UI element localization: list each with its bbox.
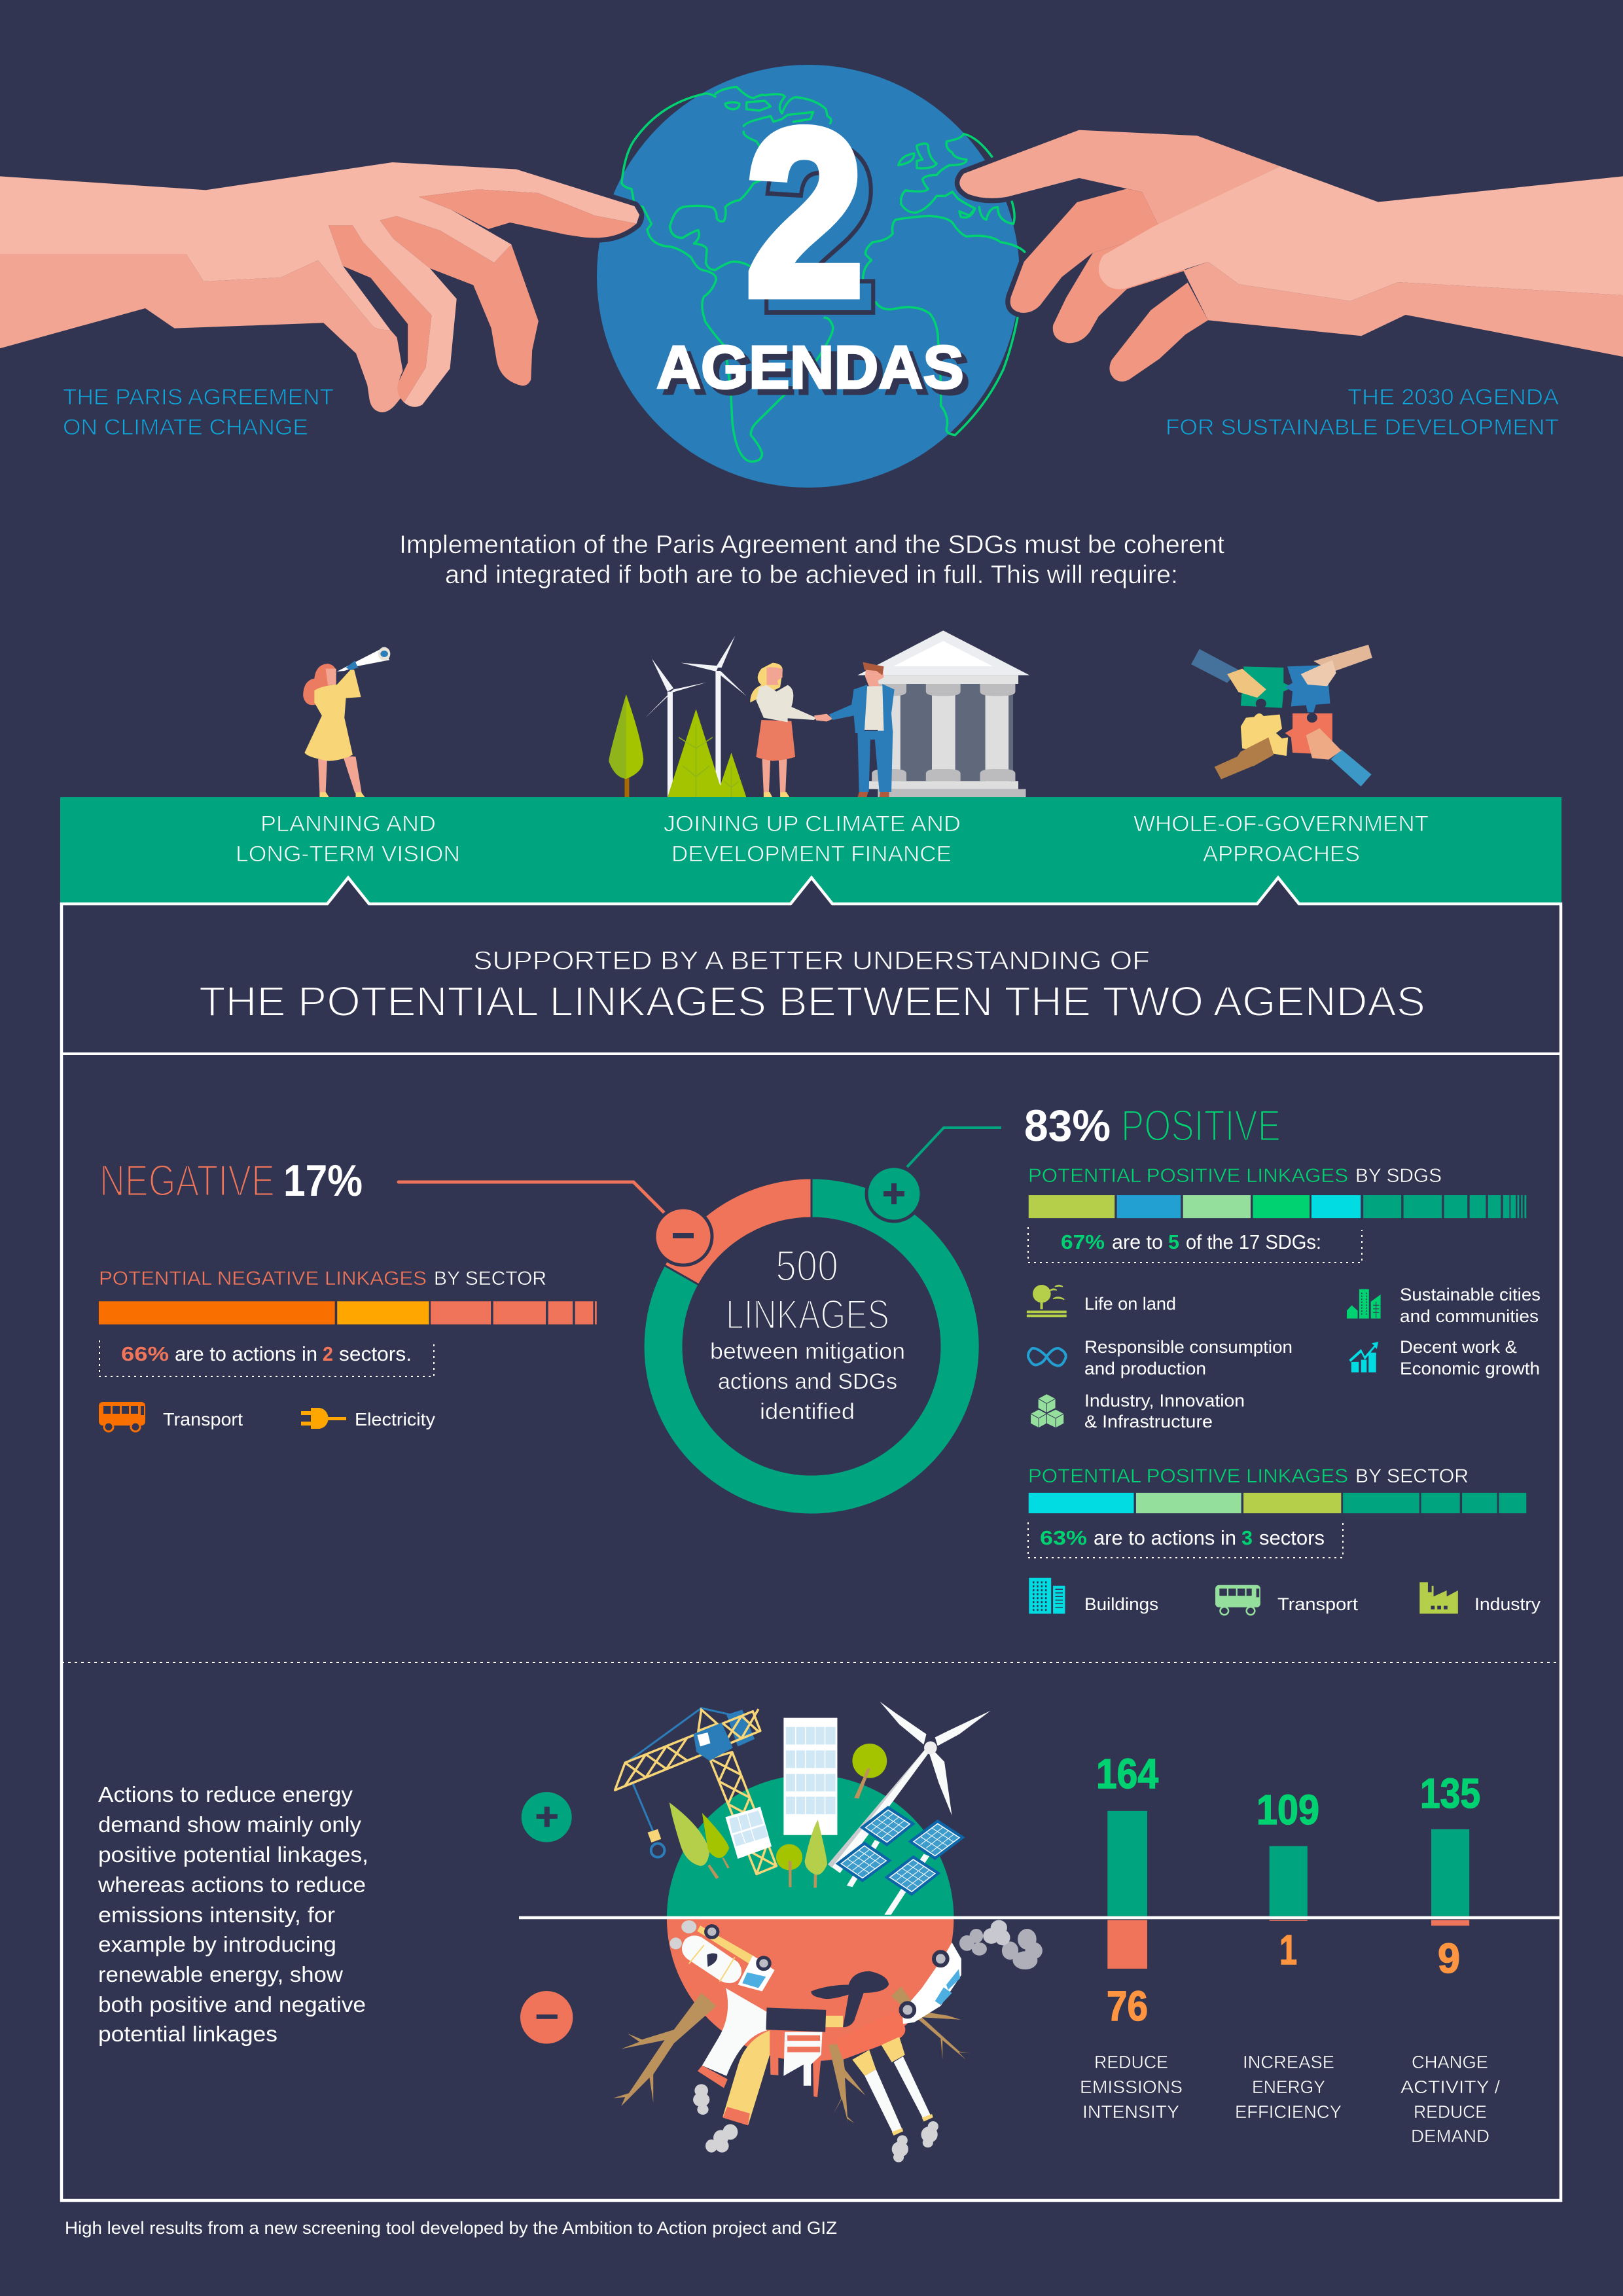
woman shaking hands bbox=[750, 663, 832, 798]
heading: 83% positive: POSITIVE bbox=[1121, 1101, 1281, 1151]
heading: potential linkages bbox=[199, 946, 1425, 1025]
text: finance: DEVELOPMENT FINANCE bbox=[671, 842, 952, 867]
callout: 63% in 3 sectors: 63% bbox=[1040, 1526, 1087, 1549]
chart: positive and negative linkages by action bbox=[1080, 1750, 1500, 2146]
car bbox=[901, 1943, 961, 2024]
callout: 67% to 5 SDGs bbox=[1028, 1227, 1362, 1263]
axis line bbox=[519, 1916, 1561, 1919]
buildings bbox=[725, 1718, 837, 1859]
icon: life on land bbox=[1027, 1285, 1067, 1317]
illustration: hands joining puzzle pieces bbox=[1191, 645, 1372, 787]
labels: action categories: REDUCE bbox=[1414, 2102, 1487, 2122]
chart: donut of 500 linkages bbox=[643, 1166, 980, 1515]
icon: cubes bbox=[1031, 1394, 1064, 1428]
globe bbox=[597, 65, 1025, 488]
labels: action categories: ACTIVITY / bbox=[1400, 2077, 1500, 2097]
text: government bbox=[1133, 812, 1429, 867]
icon: factory bbox=[1419, 1582, 1458, 1614]
lower hemisphere: coral bbox=[667, 1918, 954, 2061]
donut centre text: identified bbox=[760, 1399, 855, 1424]
trees bbox=[669, 1744, 887, 1888]
labels: SDG goals: Economic growth bbox=[1400, 1359, 1540, 1378]
icon: minus bbox=[520, 1991, 573, 2044]
big number 2: 2 bbox=[761, 96, 880, 361]
labels: action categories: INTENSITY bbox=[1082, 2102, 1179, 2122]
icon: minus badge bbox=[654, 1208, 712, 1265]
labels: action categories: ENERGY bbox=[1252, 2077, 1325, 2097]
factory with chimneys bbox=[698, 1971, 933, 2136]
solar panels bbox=[836, 1806, 965, 1915]
labels: action categories: DEMAND bbox=[1411, 2126, 1489, 2146]
callout: 67% to 5 SDGs: are to bbox=[1112, 1230, 1163, 1253]
panel: header hero bbox=[0, 65, 1623, 488]
text: finance: JOINING UP CLIMATE AND bbox=[664, 812, 961, 836]
labels: SDG goals: Industry, Innovation bbox=[1084, 1391, 1245, 1410]
word AGENDAS: AGENDAS bbox=[656, 333, 964, 401]
panel: positive linkages bbox=[907, 1101, 1541, 1615]
values: negative: 9 bbox=[1438, 1935, 1460, 1982]
subheading: positive by SDGs: POTENTIAL POSITIVE LINKAGES bbox=[1028, 1165, 1348, 1187]
intro paragraph: and integrated if both are to be achieved in full. This will require: bbox=[445, 561, 1178, 589]
values: positive bbox=[1096, 1750, 1480, 1833]
text block: actions summary bbox=[98, 1782, 368, 2046]
icon: bus bbox=[1215, 1585, 1260, 1615]
illustration: finance handshake, turbines, trees and bank bbox=[609, 630, 1029, 798]
label: Paris Agreement bbox=[63, 385, 334, 440]
footer note: High level results from a new screening tool developed by the Ambition to Action project and GIZ bbox=[65, 2218, 837, 2238]
left hand bbox=[0, 162, 639, 412]
text: government: APPROACHES bbox=[1203, 842, 1360, 867]
labels: action categories bbox=[1080, 2052, 1500, 2146]
callout: 63% in 3 sectors: are to actions in bbox=[1094, 1526, 1236, 1549]
callout: 66% in 2 sectors bbox=[99, 1340, 434, 1376]
labels: action categories: INCREASE bbox=[1243, 2052, 1334, 2072]
subheading: positive by sector: BY SECTOR bbox=[1355, 1465, 1469, 1487]
donut centre text: LINKAGES bbox=[726, 1292, 889, 1338]
subheading: positive by SDGs: BY SDGS bbox=[1355, 1165, 1442, 1187]
big number 2: 2 bbox=[745, 80, 864, 345]
labels: action categories: EMISSIONS bbox=[1080, 2077, 1183, 2097]
values: positive: 135 bbox=[1420, 1770, 1480, 1817]
bar: positive sectors bbox=[1029, 1493, 1526, 1513]
labels: SDG goals: and communities bbox=[1400, 1306, 1539, 1326]
icons: SDG goals bbox=[1027, 1285, 1381, 1428]
callout: 63% in 3 sectors: 3 bbox=[1241, 1526, 1253, 1549]
text: planning bbox=[236, 812, 460, 867]
values: positive: 109 bbox=[1257, 1786, 1319, 1833]
bar: negative sectors bbox=[99, 1301, 597, 1324]
label: transport: Transport bbox=[163, 1409, 243, 1429]
donut centre text bbox=[710, 1242, 905, 1424]
connector: negative bbox=[399, 1182, 665, 1213]
text block: actions summary: potential linkages bbox=[98, 2022, 277, 2046]
callout: 66% in 2 sectors: are to actions in bbox=[175, 1342, 317, 1365]
labels: action categories: CHANGE bbox=[1412, 2052, 1488, 2072]
heading: negative 17%: NEGATIVE bbox=[99, 1156, 275, 1206]
text block: actions summary: Actions to reduce energy bbox=[98, 1782, 353, 1806]
wind turbine bbox=[828, 1702, 991, 1873]
labels: action categories: EFFICIENCY bbox=[1235, 2102, 1342, 2122]
heading: 83% positive bbox=[1024, 1101, 1281, 1151]
dead trees bbox=[613, 1986, 970, 2125]
smoke clouds bbox=[669, 1920, 1043, 2162]
connector: positive bbox=[907, 1128, 1001, 1167]
labels: positive sectors: Transport bbox=[1277, 1594, 1359, 1614]
icon: plus badge bbox=[866, 1166, 921, 1221]
values: negative bbox=[1107, 1926, 1460, 2030]
heading: 83% positive: 83% bbox=[1024, 1101, 1111, 1151]
icon: electricity plug bbox=[301, 1408, 346, 1429]
values: negative: 1 bbox=[1279, 1926, 1297, 1973]
text: planning: PLANNING AND bbox=[260, 812, 436, 836]
icons: positive sectors bbox=[1029, 1578, 1458, 1615]
icon: city bbox=[1347, 1289, 1381, 1319]
labels: SDG goals: Life on land bbox=[1084, 1294, 1176, 1314]
text block: actions summary: both positive and negative bbox=[98, 1992, 366, 2017]
tanker truck bbox=[682, 1926, 775, 1991]
labels: SDG goals: Responsible consumption bbox=[1084, 1337, 1293, 1357]
donut centre text: actions and SDGs bbox=[718, 1369, 897, 1394]
subheading: positive by sector: POTENTIAL POSITIVE LINKAGES bbox=[1028, 1465, 1348, 1487]
pine trees bbox=[668, 709, 746, 797]
intro paragraph: Implementation of the Paris Agreement and the SDGs must be coherent bbox=[399, 531, 1224, 559]
text block: actions summary: demand show mainly only bbox=[98, 1812, 362, 1837]
text: government: WHOLE-OF-GOVERNMENT bbox=[1133, 812, 1429, 836]
icon: buildings bbox=[1029, 1578, 1065, 1614]
donut centre text: between mitigation bbox=[710, 1339, 905, 1364]
green band with three requirements bbox=[60, 797, 1561, 904]
main frame bbox=[62, 878, 1561, 2200]
bar: positive SDGs bbox=[1029, 1195, 1526, 1218]
heading: potential linkages: THE POTENTIAL LINKAGES BETWEEN THE TWO AGENDAS bbox=[199, 978, 1425, 1025]
values: positive: 164 bbox=[1096, 1750, 1158, 1797]
label: Paris Agreement: ON CLIMATE CHANGE bbox=[63, 415, 308, 440]
label: 2030 Agenda: THE 2030 AGENDA bbox=[1347, 385, 1559, 410]
text: planning: LONG-TERM VISION bbox=[236, 842, 460, 867]
bank building bbox=[857, 630, 1029, 798]
subheading: negative by sector: POTENTIAL NEGATIVE LINKAGES bbox=[99, 1268, 427, 1289]
text block: actions summary: whereas actions to reduce bbox=[98, 1873, 366, 1897]
cypress tree bbox=[609, 694, 643, 798]
labels: SDG goals: Decent work & bbox=[1400, 1337, 1517, 1357]
callout: 66% in 2 sectors: 2 bbox=[323, 1342, 333, 1365]
callout: 67% to 5 SDGs: 5 bbox=[1168, 1230, 1179, 1253]
right hand bbox=[959, 130, 1623, 382]
bars bbox=[1107, 1811, 1469, 1969]
intro paragraph bbox=[399, 531, 1224, 589]
heading: potential linkages: SUPPORTED BY A BETTER UNDERSTANDING OF bbox=[473, 946, 1150, 975]
panel: negative linkages bbox=[99, 1156, 665, 1431]
icon: infinity loop bbox=[1028, 1348, 1066, 1366]
subheading: negative by sector: BY SECTOR bbox=[434, 1268, 546, 1289]
text block: actions summary: renewable energy, show bbox=[98, 1962, 343, 1986]
man shaking hands bbox=[829, 662, 895, 798]
callout: 63% in 3 sectors: sectors bbox=[1259, 1526, 1325, 1549]
icon: plus bbox=[522, 1792, 572, 1842]
labels: positive sectors bbox=[1084, 1594, 1541, 1614]
labels: positive sectors: Buildings bbox=[1084, 1594, 1158, 1614]
callout: 66% in 2 sectors: sectors. bbox=[339, 1342, 412, 1365]
labels: SDG goals bbox=[1084, 1285, 1541, 1431]
upper hemisphere: green bbox=[667, 1775, 954, 1918]
word AGENDAS: AGENDAS bbox=[662, 339, 970, 407]
text block: actions summary: example by introducing bbox=[98, 1932, 336, 1956]
text: finance bbox=[664, 812, 961, 867]
callout: 67% to 5 SDGs: 67% bbox=[1061, 1230, 1105, 1253]
crane bbox=[615, 1708, 776, 1874]
labels: action categories: REDUCE bbox=[1094, 2052, 1168, 2072]
subheading: positive by sector bbox=[1028, 1465, 1469, 1487]
callout: 67% to 5 SDGs: of the 17 SDGs: bbox=[1186, 1230, 1321, 1253]
labels: SDG goals: Sustainable cities bbox=[1400, 1285, 1541, 1304]
label: 2030 Agenda bbox=[1166, 385, 1559, 440]
illustration: woman with telescope bbox=[303, 647, 390, 798]
label: electricity: Electricity bbox=[355, 1409, 435, 1429]
icon: growth bbox=[1349, 1342, 1378, 1372]
callout: 66% in 2 sectors: 66% bbox=[121, 1342, 169, 1365]
text block: actions summary: emissions intensity, for bbox=[98, 1903, 335, 1927]
label: 2030 Agenda: FOR SUSTAINABLE DEVELOPMENT bbox=[1166, 415, 1559, 440]
label: Paris Agreement: THE PARIS AGREEMENT bbox=[63, 385, 334, 410]
wind turbines bbox=[645, 636, 746, 798]
labels: SDG goals: & Infrastructure bbox=[1084, 1412, 1213, 1431]
text block: actions summary: positive potential linkages, bbox=[98, 1842, 368, 1867]
illustration: positive and negative globe bbox=[520, 1702, 1043, 2162]
donut centre text: 500 bbox=[776, 1242, 838, 1291]
labels: SDG goals: and production bbox=[1084, 1359, 1206, 1378]
icon: transport bus bbox=[99, 1402, 145, 1431]
labels: positive sectors: Industry bbox=[1474, 1594, 1541, 1614]
callout: 63% in 3 sectors bbox=[1028, 1522, 1343, 1558]
values: negative: 76 bbox=[1107, 1982, 1148, 2030]
heading: negative 17%: 17% bbox=[283, 1156, 363, 1206]
